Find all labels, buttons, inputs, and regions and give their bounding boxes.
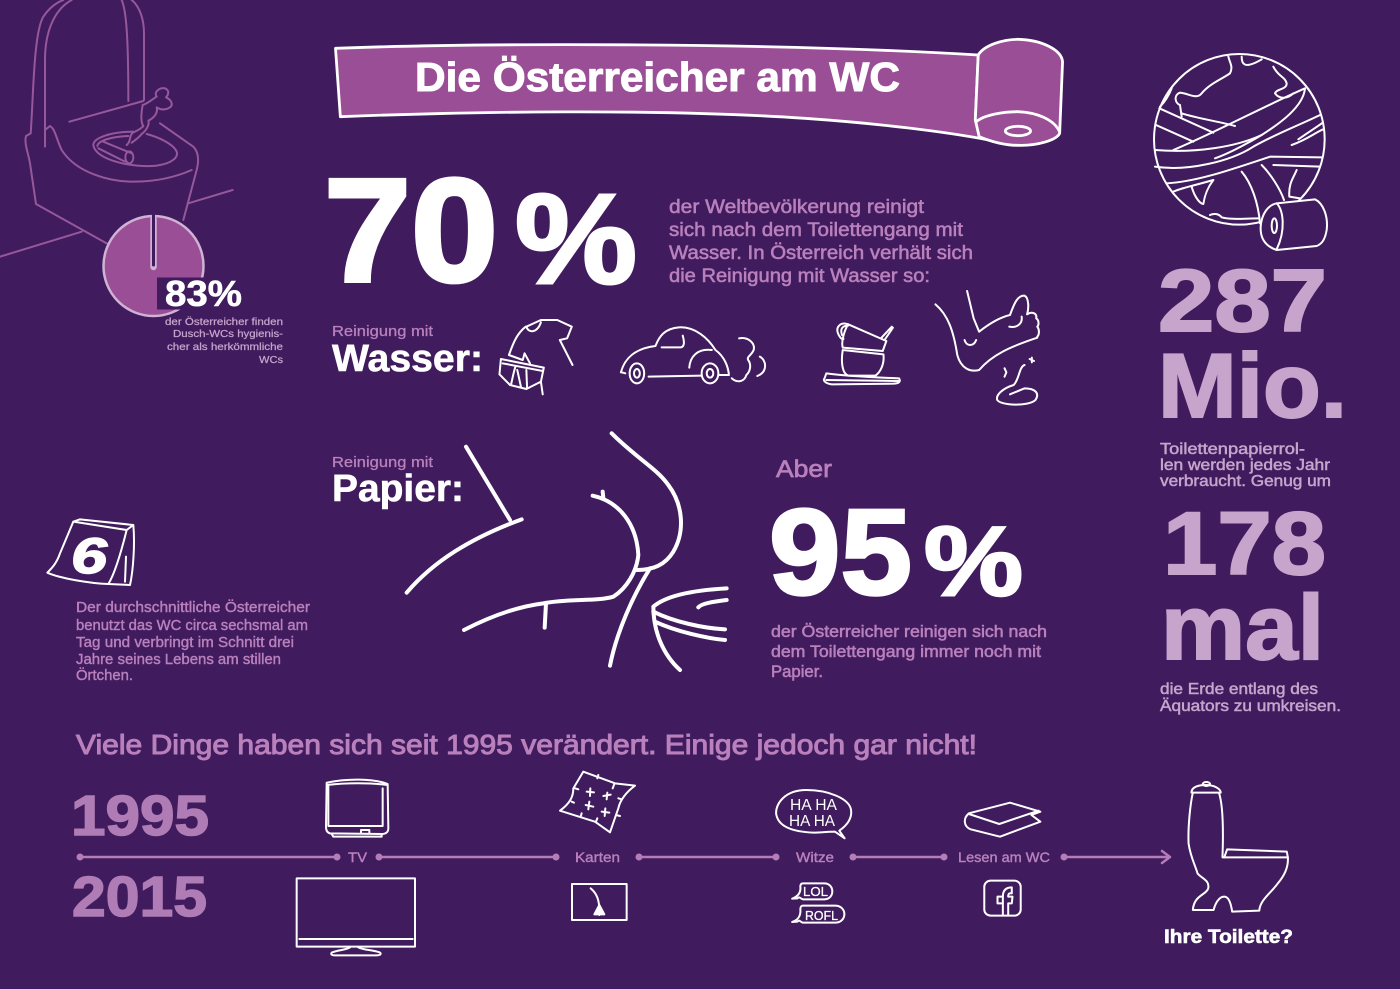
icon: navigation card	[572, 884, 627, 920]
icon: speech bubble HA HA	[776, 790, 851, 838]
icon: shower toilet background	[0, 0, 233, 257]
text: world population water: sich nach dem Toilettengang mit	[669, 220, 964, 241]
stat: 95%: %	[924, 506, 1023, 616]
icon: LOL and ROFL bubbles	[792, 883, 844, 923]
icon: LOL and ROFL bubbles: ROFL	[805, 908, 838, 923]
stat: 83%: 83%	[165, 273, 242, 314]
text: six times per day: Jahre seines Lebens am stillen	[76, 652, 281, 668]
label: Reinigung mit Papier: Reinigung mit	[332, 454, 434, 471]
text: rolls per year	[1160, 441, 1331, 490]
text: rolls per year: Toilettenpapierrol-	[1160, 441, 1305, 458]
icon: book	[965, 803, 1040, 837]
text: paper description	[771, 623, 1047, 681]
timeline line with labels: Witze	[796, 849, 834, 865]
icon: globe wrapped in toilet paper	[1154, 54, 1327, 250]
text: world population water: Wasser. In Österreich verhält sich	[669, 243, 973, 264]
text: around the equator: die Erde entlang des	[1160, 681, 1318, 698]
year: 1995: 1995	[71, 784, 209, 848]
icon: laundry	[499, 320, 573, 394]
text: six times per day: Örtchen.	[76, 666, 133, 684]
stat: 178 mal: mal	[1161, 577, 1324, 679]
text: 83% description: Dusch-WCs hygienis-	[173, 328, 284, 340]
stat: 70%: 70	[324, 149, 498, 313]
text: world population water	[669, 197, 973, 287]
stat: 70%	[324, 149, 637, 313]
text: paper description: dem Toilettengang immer noch mit	[771, 643, 1041, 661]
icon: old TV	[326, 780, 388, 837]
stat: 178 mal: 178	[1163, 493, 1326, 593]
icon: facebook	[984, 881, 1021, 916]
icon: speech bubble HA HA: HA HA	[789, 813, 835, 830]
text: six times per day: Der durchschnittliche Österreicher	[76, 598, 310, 616]
icon: LOL and ROFL bubbles: LOL	[803, 884, 828, 899]
text: 83% description: cher als herkömmliche	[167, 341, 283, 353]
label: Reinigung mit Wasser: Reinigung mit	[332, 323, 434, 340]
timeline line with labels: Lesen am WC	[958, 849, 1050, 865]
text: around the equator	[1160, 681, 1341, 715]
text: rolls per year: len werden jedes Jahr	[1160, 457, 1331, 474]
stat: 287 Mio.: Mio.	[1158, 336, 1347, 437]
label: Reinigung mit Wasser: Wasser:	[332, 338, 483, 380]
icon: foot and poop	[935, 291, 1039, 405]
text: world population water: der Weltbevölkerung reinigt	[669, 197, 925, 218]
text: six times per day	[76, 598, 310, 684]
text: paper description: der Österreicher reinigen sich nach	[771, 623, 1047, 641]
icon: speech bubble HA HA: HA HA	[790, 797, 837, 814]
icon: toilet	[1188, 782, 1288, 912]
icon: calendar six	[47, 519, 134, 585]
illustration: person on toilet	[407, 433, 727, 670]
text: world population water: die Reinigung mit Wasser so:	[669, 266, 930, 287]
icon: calendar six: 6	[71, 528, 109, 584]
text: around the equator: Äquators zu umkreisen.	[1160, 697, 1341, 715]
stat: 95%: 95	[769, 484, 912, 620]
text: six times per day: benutzt das WC circa sechsmal am	[76, 618, 308, 634]
text: Aber: Aber	[776, 456, 832, 483]
icon: paper map	[560, 772, 635, 832]
text: rolls per year: verbraucht. Genug um	[1160, 473, 1331, 490]
timeline line with labels: TV	[348, 849, 368, 865]
stat: 287 Mio.: 287	[1158, 251, 1327, 350]
text: 83% description	[165, 316, 284, 366]
timeline line with labels: Karten	[575, 849, 620, 865]
icon: dishes	[824, 324, 900, 384]
icon: new TV	[297, 878, 415, 955]
heading: timeline: Viele Dinge haben sich seit 1995 verändert. Einige jedoch gar nicht!	[76, 729, 977, 760]
stat: 178 mal	[1161, 493, 1326, 679]
stat: 70%: %	[515, 168, 637, 311]
icon: car	[621, 327, 765, 383]
label: Reinigung mit Papier: Papier:	[332, 468, 464, 510]
title banner: toilet paper roll	[336, 39, 1063, 145]
year: 2015: 2015	[72, 865, 207, 929]
stat: 287 Mio.	[1158, 251, 1347, 437]
heading: title: Die Österreicher am WC	[415, 54, 900, 100]
caption: Ihre Toilette: Ihre Toilette?	[1164, 926, 1293, 948]
stat: 95%	[769, 484, 1023, 620]
text: 83% description: WCs	[259, 354, 283, 366]
text: six times per day: Tag und verbringt im Schnitt drei	[76, 635, 294, 651]
pie chart: 83%	[104, 210, 243, 316]
text: paper description: Papier.	[771, 663, 823, 681]
text: 83% description: der Österreicher finden	[165, 316, 283, 328]
timeline line with labels	[76, 849, 1170, 865]
